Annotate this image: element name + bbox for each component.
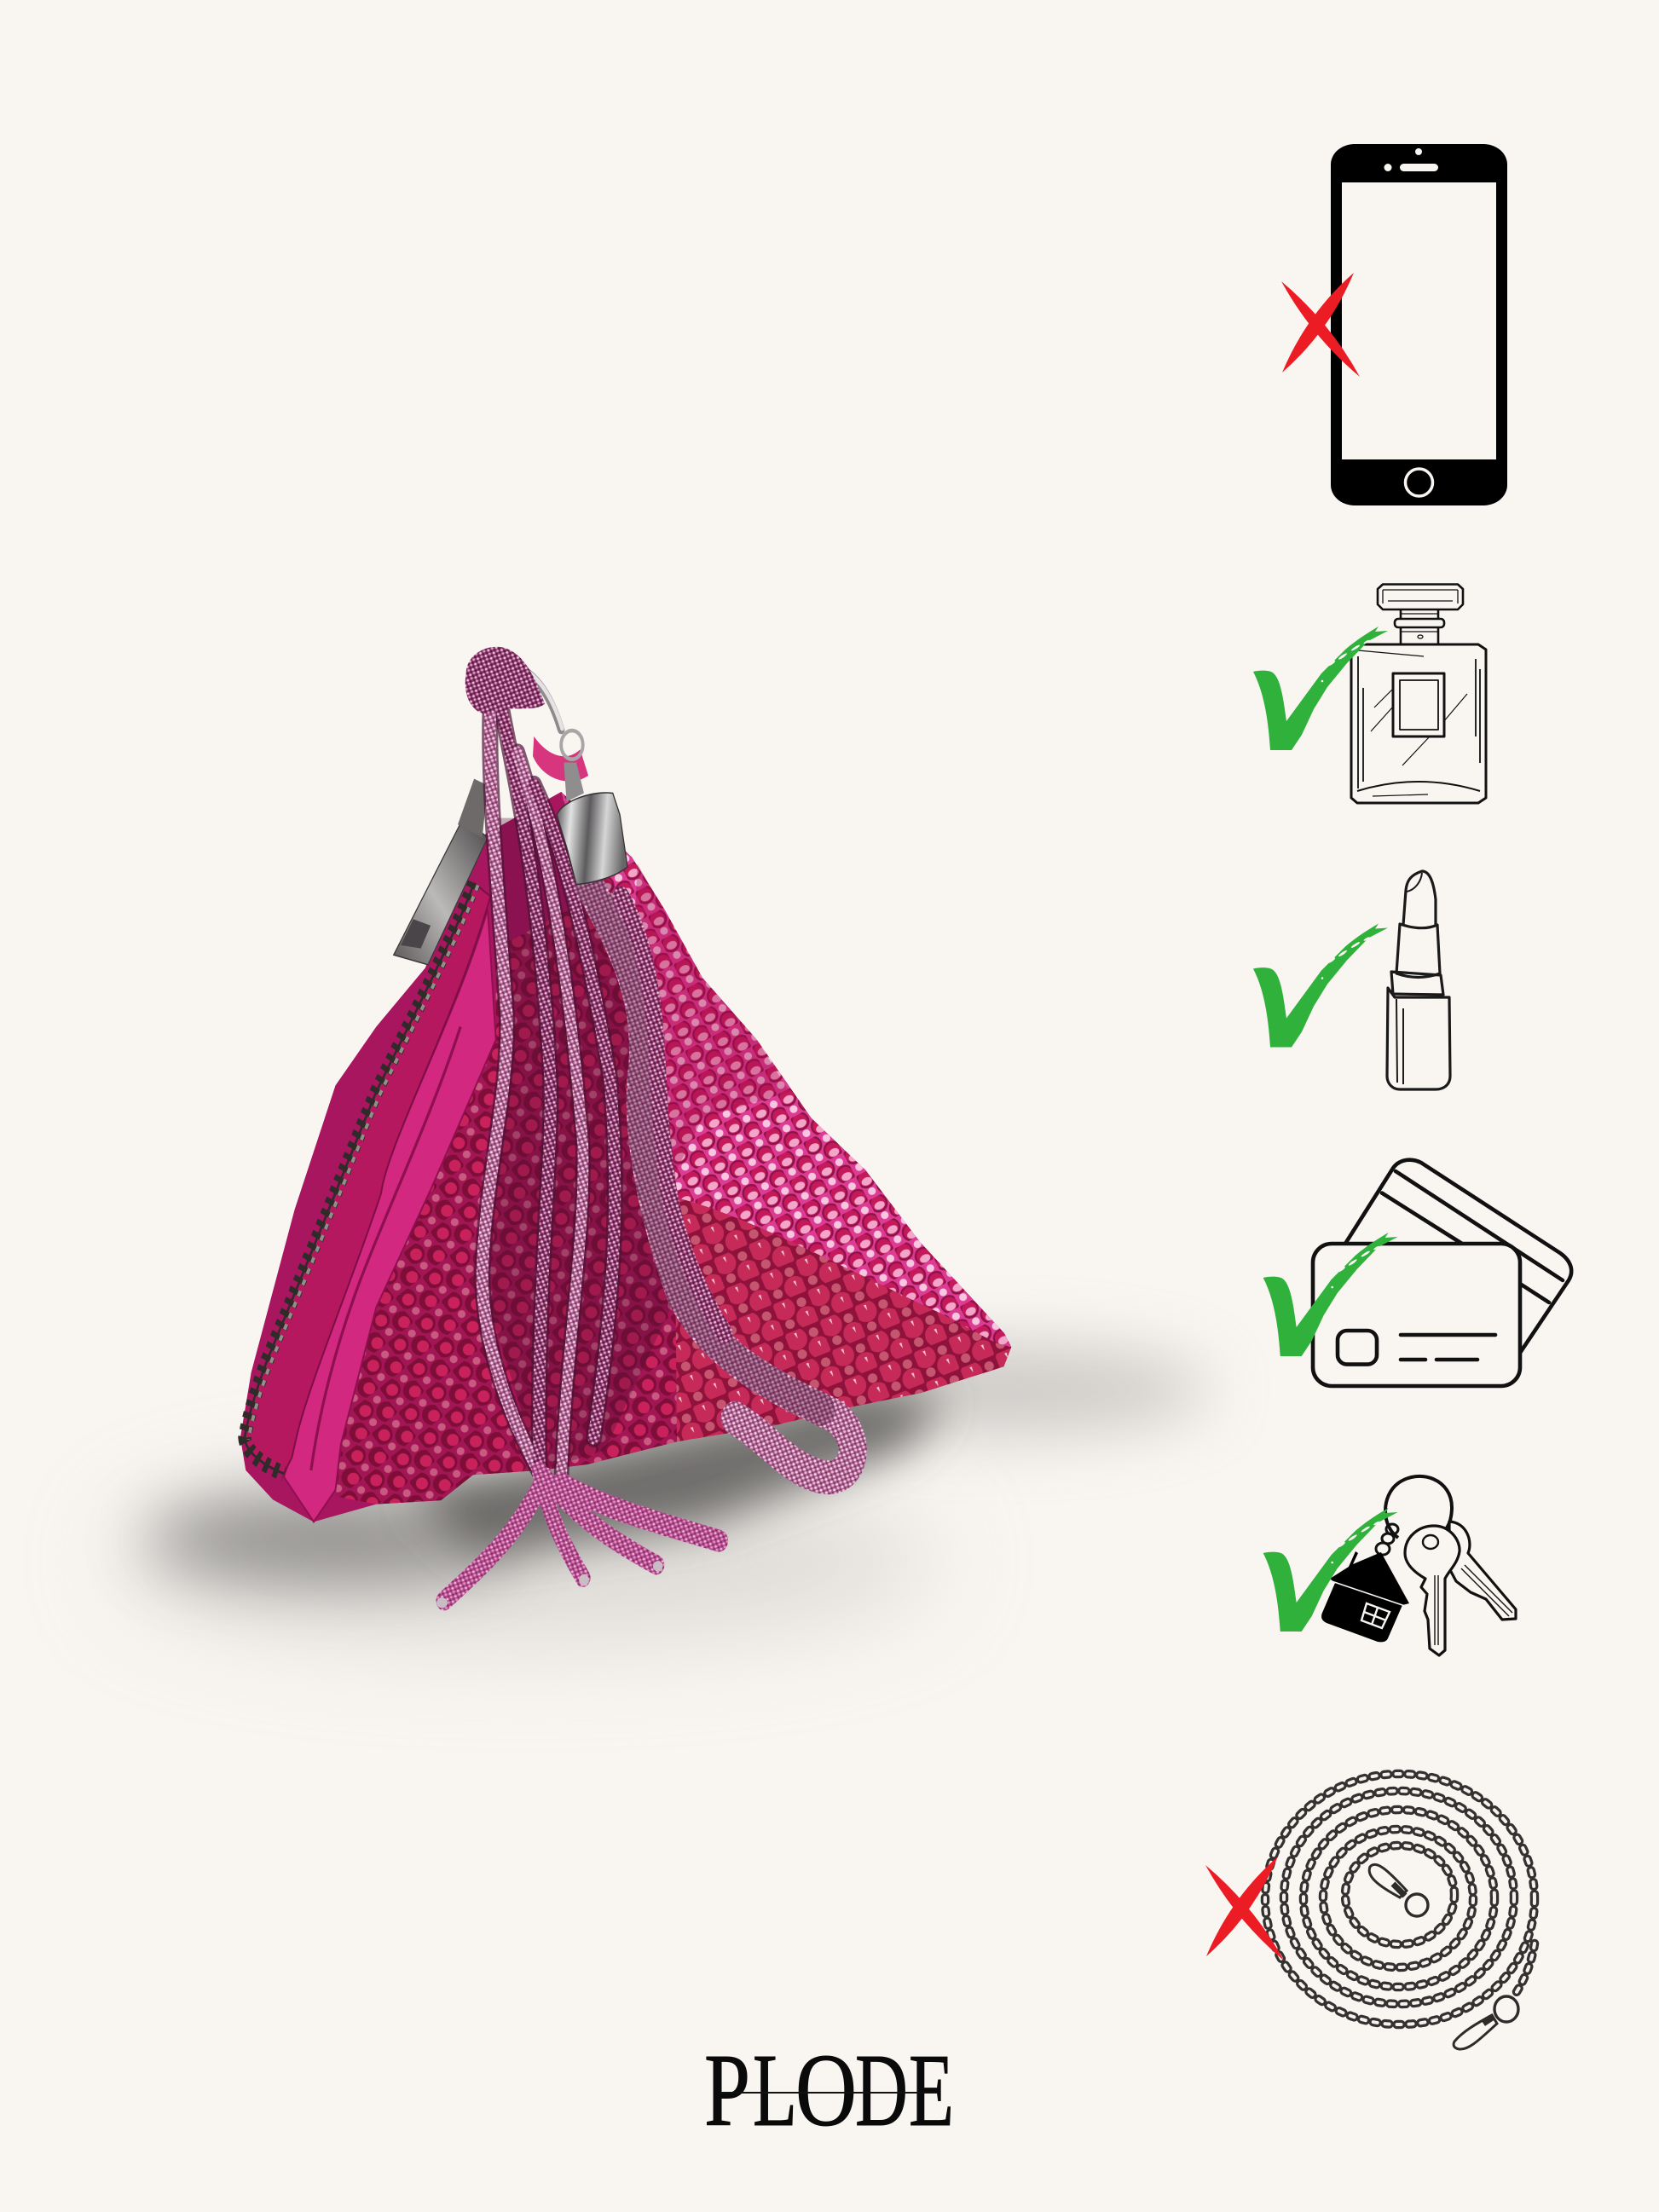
- logo: PLODE: E: [909, 2033, 954, 2148]
- knot: [465, 647, 545, 714]
- product photo: crystal pyramid bag: [240, 647, 1011, 1608]
- check mark: keys: [1263, 1508, 1398, 1632]
- icon: perfume bottle: [1351, 585, 1486, 803]
- zipper pull: [394, 779, 488, 965]
- red cross: phone: [1281, 273, 1360, 377]
- crystal face: red band: [637, 1196, 1011, 1441]
- tassel tails: [444, 1477, 545, 1601]
- velvet trim: [284, 910, 496, 1522]
- bag body silhouette: [240, 792, 1011, 1522]
- back key: [1449, 1522, 1516, 1620]
- icon: credit cards: [1313, 1160, 1571, 1386]
- zipper teeth: [245, 883, 478, 1474]
- crystal face: dark left side: [336, 896, 677, 1505]
- pink loop: [533, 736, 588, 782]
- tassel strand edges: [483, 707, 615, 1490]
- check mark: cards: [1263, 1233, 1398, 1356]
- chain coils: link outlines: [1265, 1774, 1535, 2024]
- outer clasp: [1454, 1996, 1518, 2049]
- darker crystals near the top of the face: [632, 863, 789, 1183]
- logo: PLODE: [704, 2033, 954, 2148]
- logo: PLODE: L: [753, 2033, 797, 2148]
- logo: PLODE: D: [855, 2033, 908, 2148]
- inner clasp: [1369, 1864, 1428, 1916]
- house fob: [1321, 1551, 1409, 1642]
- zipper tape: [245, 883, 490, 1474]
- tassel strands: [444, 707, 853, 1601]
- small jump ring: [561, 731, 583, 759]
- front key: [1405, 1526, 1460, 1655]
- metal end cap: [557, 793, 627, 885]
- check mark: lipstick: [1253, 924, 1388, 1047]
- logo: PLODE: P: [704, 2033, 750, 2148]
- icon: lipstick: [1387, 871, 1450, 1089]
- icon: house keyring: [1321, 1476, 1516, 1655]
- crystal face: right side: [561, 792, 1011, 1441]
- bag shadow: [119, 1345, 1211, 1641]
- icon: phone: [1331, 144, 1507, 505]
- dark shade behind tassel: [480, 818, 686, 1470]
- logo: PLODE: O: [795, 2033, 857, 2148]
- check mark: perfume: [1253, 627, 1388, 750]
- key ring: [1385, 1476, 1452, 1547]
- velvet seam: [311, 1026, 460, 1470]
- connector: [564, 763, 584, 801]
- icon: coiled chain: [1265, 1774, 1535, 2049]
- silver ring: [504, 662, 561, 730]
- strand tips: [436, 1561, 662, 1608]
- chain coils: link centres: [1265, 1774, 1535, 2024]
- braided strand: [588, 883, 853, 1477]
- key fob beads: [1376, 1524, 1398, 1555]
- red cross: chain: [1205, 1857, 1284, 1961]
